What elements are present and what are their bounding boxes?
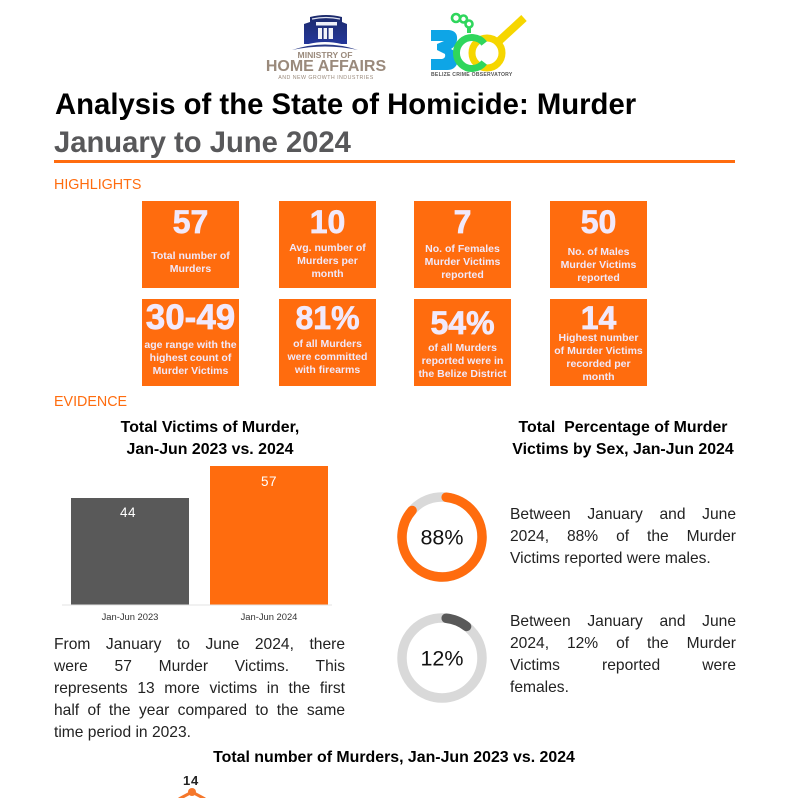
subtitle: January to June 2024 [54,127,351,159]
stat card: age range: highest count of [150,352,231,364]
text: bar chart commentary: half of the year compared to the same [54,702,345,719]
stat card: Belize District: 54% [430,305,495,341]
stat card: highest per month [550,299,647,386]
heading: bar chart title [120,419,299,458]
stat card: female victims: reported [441,269,484,281]
text: bar chart commentary: represents 13 more victims in the first [54,680,345,697]
logo: Ministry of Home Affairs: HOME AFFAIRS [266,58,386,75]
stat card: highest per month: month [582,371,615,383]
stat card: female victims [414,201,511,288]
logo: Belize Crime Observatory [431,12,527,78]
stat card: age range [142,299,239,386]
text: bar chart commentary [54,636,345,741]
stat card: average per month: month [311,268,344,280]
bar chart: victims 2023 vs 2024 [62,466,332,622]
stat card: male victims [550,201,647,288]
stat card: firearms: 81% [295,300,360,336]
text: bar chart commentary: From January to June 2024, there [54,636,345,653]
heading: evidence: EVIDENCE [54,394,127,410]
logo: Ministry of Home Affairs [266,15,386,81]
stat card: age range: Murder Victims [153,365,228,377]
bar chart: victims 2023 vs 2024: 57 [261,474,277,489]
title: Analysis of the State of Homicide: Murder [55,88,636,121]
heading: bar chart title: Total Victims of Murder, [121,419,299,436]
stat card: female victims: No. of Females [425,243,500,255]
logo: Belize Crime Observatory: BELIZE CRIME OBSERVATORY [431,72,513,78]
stat card: total murders: 57 [173,204,208,240]
heading: bar chart title: Jan-Jun 2023 vs. 2024 [127,441,293,458]
line chart: peak value 14: 14 [183,773,199,788]
logo: Ministry of Home Affairs: MINISTRY OF [298,50,352,60]
logo: Ministry of Home Affairs: AND NEW GROWTH INDUSTRIES [278,75,374,81]
stat card: average per month: Murders per [297,255,358,267]
text: females commentary: females. [510,679,569,696]
donut: males 88%: 88% [420,526,464,550]
text: females commentary: Victims reported were [510,657,736,674]
stat card: Belize District: the Belize District [418,368,507,380]
stat card: average per month: Avg. number of [289,242,366,254]
text: males commentary: 2024, 88% of the Murder [510,528,736,545]
stat card: total murders [142,201,239,288]
stat card: female victims: 7 [454,204,471,240]
stat card: Belize District: reported were in [422,355,503,367]
donut: females 12% [397,613,487,703]
text: females commentary: 2024, 12% of the Murder [510,635,736,652]
stat card: male victims: reported [577,272,620,284]
stat card: firearms: were committed [288,351,367,363]
stat card: average per month: 10 [310,204,345,240]
stat card: firearms [279,299,376,386]
text: females commentary [510,613,736,696]
bar chart: victims 2023 vs 2024: Jan-Jun 2024 [241,611,297,622]
text: bar chart commentary: time period in 2023. [54,724,191,741]
stat card: total murders: Murders [170,263,211,275]
stat card: male victims: Murder Victims [561,259,636,271]
line chart: peak value 14 [178,773,206,798]
stat card: firearms: with firearms [295,364,360,376]
heading: line chart title: Total number of Murders, Jan-Jun 2023 vs. 2024 [213,749,575,766]
stat card: highest per month: Highest number [559,332,638,344]
heading: donut section title: Total Percentage of Murder [519,419,727,436]
donut: females 12%: 12% [420,646,464,670]
stat card: age range: age range with the [144,339,237,351]
stat card: male victims: No. of Males [568,246,629,258]
stat card: Belize District [414,299,511,386]
text: males commentary: Victims reported were males. [510,550,711,567]
stat card: highest per month: of Murder Victims [554,345,643,357]
stat card: male victims: 50 [581,204,616,240]
text: males commentary: Between January and June [510,506,736,523]
heading: highlights: HIGHLIGHTS [54,177,141,193]
stat card: female victims: Murder Victims [425,256,500,268]
bar chart: victims 2023 vs 2024: 44 [120,505,136,520]
stat card: total murders: Total number of [151,250,230,262]
stat card: Belize District: of all Murders [428,342,497,354]
text: bar chart commentary: were 57 Murder Victims. This [54,658,345,675]
text: males commentary [510,506,736,567]
text: females commentary: Between January and June [510,613,736,630]
heading: donut section title line 2: Victims by Sex, Jan-Jun 2024 [512,441,734,458]
stat card: firearms: of all Murders [293,338,362,350]
donut: males 88% [397,492,487,582]
stat card: highest per month: recorded per [566,358,631,370]
stat card: average per month [279,201,376,288]
bar chart: victims 2023 vs 2024: Jan-Jun 2023 [102,611,158,622]
stat card: age range: 30-49 [146,298,235,337]
stat card: highest per month: 14 [581,300,616,336]
